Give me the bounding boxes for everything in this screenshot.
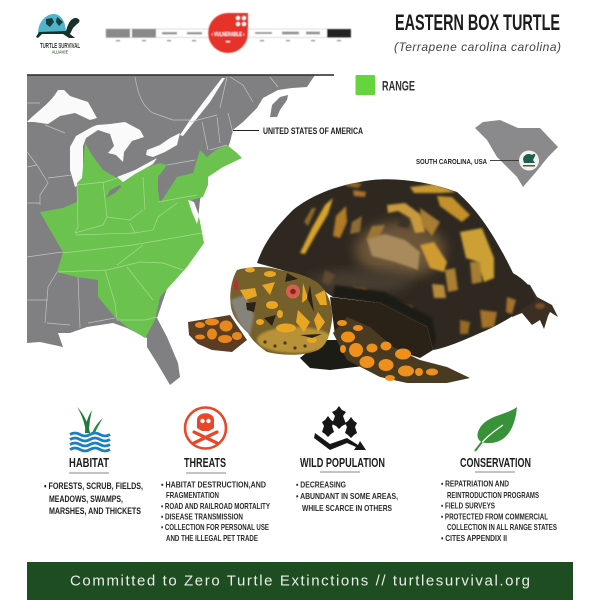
- threats list: • HABITAT DESTRUCTION,AND: [161, 480, 266, 490]
- front left leg: [188, 315, 247, 352]
- icon: leaf: [475, 407, 517, 451]
- conservation list: REINTRODUCTION PROGRAMS: [447, 491, 539, 500]
- conservation list: • CITES APPENDIX II: [441, 534, 507, 543]
- IUCN status scale: [106, 13, 351, 53]
- vulnerable red badge: [208, 13, 248, 53]
- state borders on range: [58, 177, 202, 320]
- threats list: • DISEASE TRANSMISSION: [161, 512, 243, 522]
- legend: range: RANGE: [382, 78, 415, 94]
- threats list: FRAGMENTATION: [166, 491, 219, 500]
- front right leg: [333, 317, 470, 383]
- logo: Turtle Survival Alliance: [36, 14, 80, 54]
- callout: United States of America: [233, 126, 364, 136]
- threats list: [161, 480, 270, 543]
- underside: [300, 340, 372, 370]
- heading: threats: THREATS: [184, 456, 226, 470]
- panel: conservation: [441, 407, 557, 543]
- IUCN status scale: ‹ VULNERABLE ›: [212, 32, 245, 38]
- panel: habitat: [44, 407, 143, 517]
- footer banner: [27, 562, 573, 600]
- rule above map: [27, 74, 334, 76]
- logo globe shell: [38, 14, 66, 33]
- wild population list: • DECREASING: [296, 480, 346, 490]
- icon: turtles with declining arrow: [314, 406, 366, 450]
- conservation list: [441, 480, 557, 543]
- shell rim shadow: [333, 285, 436, 350]
- shell: [257, 179, 535, 350]
- locator logo badge: [519, 150, 539, 170]
- heading: habitat: HABITAT: [69, 456, 109, 470]
- conservation list: • FIELD SURVEYS: [441, 502, 495, 510]
- shell patches: [300, 180, 516, 334]
- wild population list: • ABUNDANT IN SOME AREAS,: [296, 492, 398, 501]
- South Carolina shape: [475, 120, 558, 187]
- heading: wild population: WILD POPULATION: [300, 456, 385, 470]
- logo turtle head and legs: [36, 18, 79, 38]
- habitat list: MEADOWS, SWAMPS,: [49, 494, 123, 505]
- icon: water and grass: [70, 407, 110, 451]
- shell shading: [355, 222, 445, 278]
- eye: [286, 284, 300, 298]
- scientific name: (Terrapene carolina carolina): [394, 40, 561, 54]
- logo: Turtle Survival Alliance: ALLIANCE: [52, 50, 68, 54]
- panel: wild population: [296, 406, 398, 513]
- lake erie and ohio notch: [106, 185, 121, 198]
- callout: United States of America: UNITED STATES OF AMERICA: [263, 126, 364, 136]
- logo wordmark: TURTLE SURVIVAL: [40, 41, 80, 50]
- state borders off range: [27, 77, 278, 328]
- locator label: SOUTH CAROLINA, USA: [416, 157, 487, 166]
- panel: threats: [161, 408, 270, 543]
- status boxes: [106, 29, 130, 38]
- conservation list: • PROTECTED FROM COMMERCIAL: [441, 512, 548, 522]
- icon: skull and crossbones: [185, 408, 226, 448]
- wild population list: WHILE SCARCE IN OTHERS: [302, 504, 392, 513]
- habitat list: [44, 481, 143, 517]
- threats list: AND THE ILLEGAL PET TRADE: [166, 534, 258, 543]
- habitat list: MARSHES, AND THICKETS: [49, 506, 141, 517]
- legend: range: [356, 75, 415, 95]
- nova scotia: [270, 95, 288, 117]
- great lakes: [27, 78, 225, 187]
- threats list: • ROAD AND RAILROAD MORTALITY: [161, 502, 270, 511]
- conservation list: • REPATRIATION AND: [441, 480, 509, 488]
- head: [230, 267, 333, 355]
- locator: South Carolina: [416, 120, 558, 187]
- footer text: Committed to Zero Turtle Extinctions // turtlesurvival.org: [70, 572, 530, 590]
- threats list: • COLLECTION FOR PERSONAL USE: [161, 523, 269, 532]
- habitat list: • FORESTS, SCRUB, FIELDS,: [44, 481, 143, 492]
- map land: grey base: [27, 75, 315, 385]
- turtle illustration: [188, 179, 558, 383]
- conservation list: COLLECTION IN ALL RANGE STATES: [447, 523, 557, 532]
- chesapeake bay: [188, 200, 199, 224]
- heading: conservation: CONSERVATION: [460, 456, 531, 470]
- map: eastern North America range map: [27, 75, 315, 385]
- wild population list: [296, 480, 398, 513]
- range: green area: [40, 143, 242, 338]
- rear leg: [512, 280, 558, 329]
